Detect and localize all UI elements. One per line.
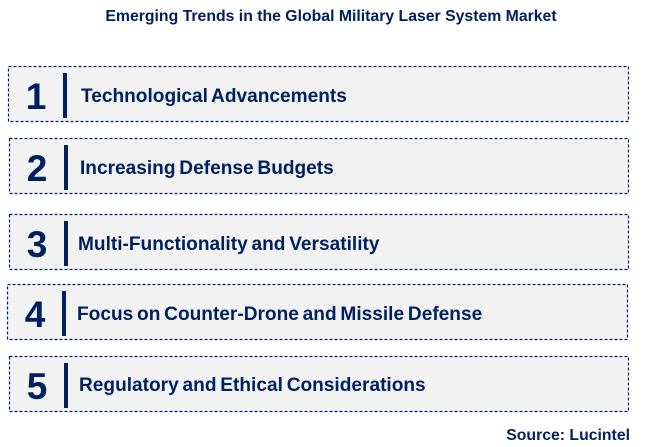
panel: trend 3 [10, 214, 628, 270]
label 4: Focus on Counter-Drone and Missile Defense [77, 304, 482, 325]
label 2: Increasing Defense Budgets [80, 158, 334, 179]
divider bar 5 [64, 363, 68, 408]
label 3: Multi-Functionality and Versatility [78, 234, 380, 255]
number 2: 2 [27, 148, 47, 189]
number 3: 3 [27, 224, 47, 265]
divider bar 3 [64, 221, 68, 266]
source note: Source: Lucintel [506, 427, 630, 444]
label 5: Regulatory and Ethical Considerations [79, 375, 426, 396]
panel: trend 2 [10, 138, 628, 194]
divider bar 1 [63, 73, 67, 118]
number 5: 5 [27, 366, 47, 407]
label 1: Technological Advancements [81, 86, 347, 107]
divider bar 2 [64, 145, 68, 190]
number 1: 1 [26, 76, 46, 117]
number 4: 4 [25, 294, 46, 335]
panel: trend 1 [8, 66, 628, 122]
title: Emerging Trends in the Global Military Laser System Market [105, 8, 557, 25]
panel: trend 4 [8, 284, 628, 340]
divider bar 4 [62, 291, 66, 336]
panel: trend 5 [10, 356, 628, 412]
